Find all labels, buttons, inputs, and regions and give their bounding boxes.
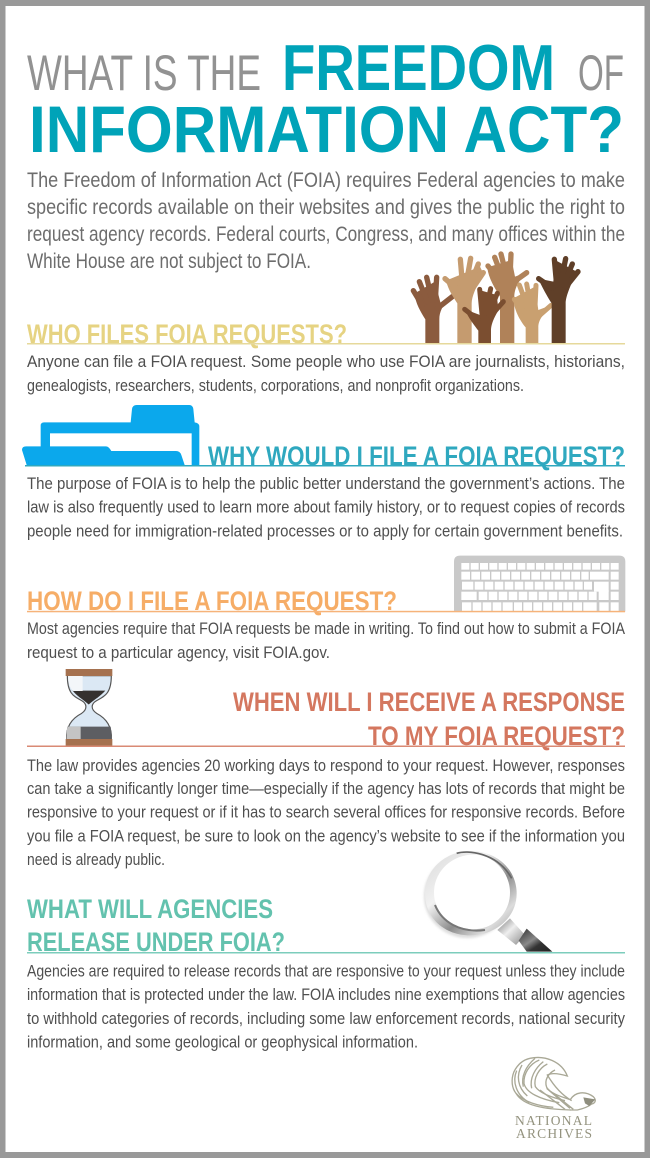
intro paragraph: White House are not subject to FOIA. — [27, 250, 311, 273]
rule — [27, 746, 625, 747]
section: when response — [27, 687, 625, 869]
title — [27, 31, 624, 166]
section: why file — [25, 441, 625, 540]
rule — [27, 343, 625, 344]
icon: raised hands — [413, 254, 578, 344]
intro paragraph — [27, 169, 625, 273]
rule — [27, 952, 625, 954]
section: how to file — [27, 586, 625, 662]
body text: need is already public. — [27, 851, 165, 869]
rule — [25, 465, 625, 466]
body text: information, and some geological or geophysical information. — [27, 1034, 418, 1052]
heading: when response — [233, 687, 625, 751]
icon: keyboard — [454, 556, 625, 612]
logo: National Archives — [512, 1057, 595, 1141]
logo wordmark — [515, 1113, 592, 1141]
icon: hourglass — [66, 669, 112, 746]
heading: how to file: HOW DO I FILE A FOIA REQUEST? — [27, 586, 397, 616]
section: what released — [27, 894, 626, 1052]
logo wordmark: ARCHIVES — [516, 1126, 592, 1141]
title: OF — [578, 45, 624, 101]
body text: request to a particular agency, visit FOIA.gov. — [27, 644, 330, 662]
body text — [27, 353, 625, 395]
heading: what released: RELEASE UNDER FOIA? — [27, 927, 285, 957]
title: WHAT IS THE — [27, 45, 261, 101]
body text: Anyone can file a FOIA request. Some people who use FOIA are journalists, historians, — [27, 353, 625, 371]
section: who files — [27, 319, 625, 395]
body text — [27, 757, 625, 869]
body text — [27, 620, 625, 662]
body text — [27, 475, 625, 540]
icon: eagle — [512, 1057, 595, 1110]
icon: magnifying glass — [424, 851, 552, 952]
rule — [27, 611, 625, 612]
body text — [27, 962, 626, 1052]
title: FREEDOM — [282, 31, 555, 104]
logo wordmark: NATIONAL — [515, 1113, 592, 1128]
body text: genealogists, researchers, students, corporations, and nonprofit organizations. — [27, 377, 524, 395]
heading: who files: WHO FILES FOIA REQUESTS? — [27, 319, 347, 349]
heading: what released: WHAT WILL AGENCIES — [27, 894, 273, 924]
icon: folder — [22, 405, 199, 465]
heading: what released — [27, 894, 285, 957]
